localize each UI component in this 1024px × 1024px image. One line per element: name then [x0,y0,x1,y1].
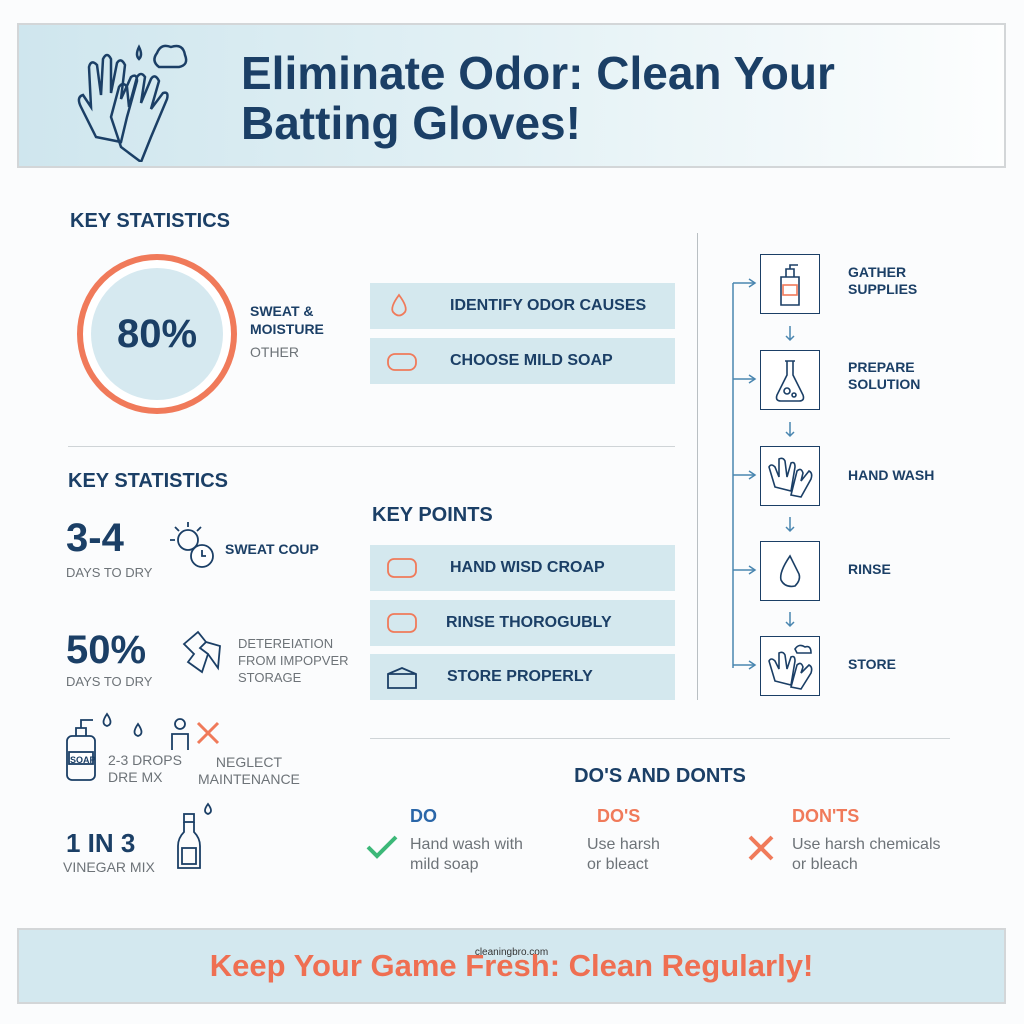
title: Batting Gloves! [241,97,581,149]
don'ts column: DON'TS [792,806,859,826]
stat: 1 in 3: VINEGAR MIX [63,859,155,875]
legend: SWEAT & [250,303,314,319]
stat: 3-4: DAYS TO DRY [66,565,152,580]
stat: soap drops: NEGLECT [216,754,282,770]
heading: key points: KEY POINTS [372,504,493,526]
legend [250,303,324,360]
stat: 3-4: 3-4 [66,516,124,560]
do's column [587,806,660,873]
flow: process steps [732,278,794,670]
step 1 [760,254,820,314]
stat: 1 in 3 [63,802,212,875]
title [241,47,835,149]
footer banner [17,928,1006,1004]
heading: key statistics 2: KEY STATISTICS [68,470,228,492]
stat: 50%: FROM IMPOPVER [238,653,349,668]
step 4 [760,541,820,601]
box: rinse: RINSE THOROGUBLY [446,614,612,631]
stat: 1 in 3: 1 IN 3 [66,828,135,858]
stat: soap drops: MAINTENANCE [198,771,300,787]
box: rinse [370,600,675,646]
box: identify odor causes [370,283,675,329]
text: GATHER [848,264,906,280]
box: store: STORE PROPERLY [447,668,593,685]
legend: OTHER [250,344,299,360]
stat: 50% [66,628,349,689]
don'ts column: Use harsh chemicals [792,836,940,853]
stat: soap drops [66,712,300,787]
heading: do's and donts: DO'S AND DONTS [574,765,746,787]
stat: soap drops: DRE MX [108,769,162,785]
box: choose mild soap [370,338,675,384]
text: PREPARE [848,359,915,375]
box: choose mild soap: CHOOSE MILD SOAP [450,352,613,369]
chart: 80% ring: 80% [117,312,197,356]
do's column: Use harsh [587,836,660,853]
don'ts column: or bleach [792,856,858,873]
text: STORE [848,656,896,672]
box: hand wash: HAND WISD CROAP [450,559,605,576]
do column: DO [410,806,437,826]
stat: 50%: 50% [66,628,146,672]
do column [366,806,523,873]
box: store [370,654,675,700]
stat: 50%: DETEREIATION [238,636,333,651]
stat: 50%: DAYS TO DRY [66,674,152,689]
step 5 [760,636,820,696]
box: hand wash [370,545,675,591]
do's column: or bleact [587,856,648,873]
title: Eliminate Odor: Clean Your [241,47,835,99]
do's column: DO'S [597,806,640,826]
stat: soap drops: SOAP [70,755,96,765]
step 2 [760,350,820,410]
stat: 50%: STORAGE [238,670,301,685]
footer banner: cleaningbro.com [475,947,548,958]
text: HAND WASH [848,467,934,483]
text: SOLUTION [848,376,920,392]
step 3 [760,446,820,506]
text: SUPPLIES [848,281,917,297]
don'ts column [748,806,940,873]
do column: mild soap [410,856,478,873]
icon: gloves [78,44,188,162]
stat: soap drops: 2-3 DROPS [108,752,182,768]
chart: 80% ring [77,254,237,414]
heading: key statistics 1: KEY STATISTICS [70,210,230,232]
text: RINSE [848,561,891,577]
box: identify odor causes: IDENTIFY ODOR CAUSES [450,297,646,314]
header banner [17,23,1006,168]
footer banner: Keep Your Game Fresh: Clean Regularly! [210,948,813,983]
legend: MOISTURE [250,321,324,337]
stat: 3-4 [66,516,319,580]
stat: 3-4: SWEAT COUP [225,541,319,557]
do column: Hand wash with [410,836,523,853]
